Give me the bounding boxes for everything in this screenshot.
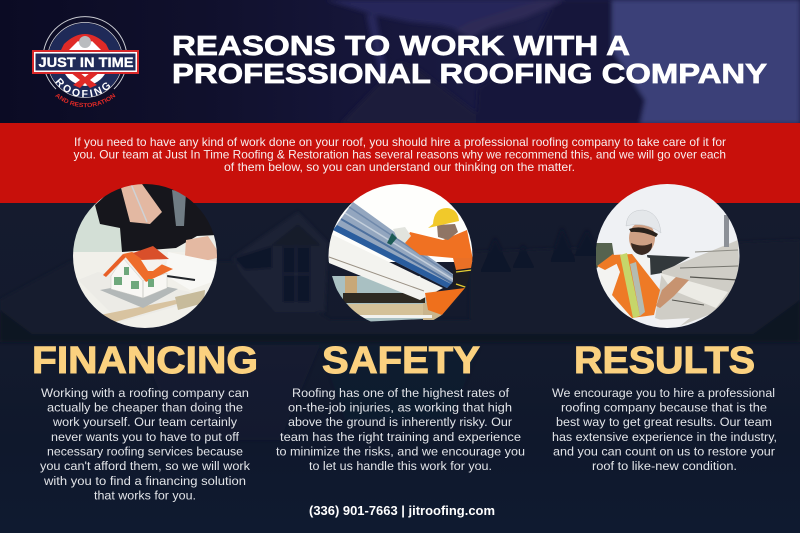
- body: safety: above the ground is inherently risky. Our: [288, 415, 512, 429]
- lower background: house at dusk: [0, 203, 800, 533]
- body: financing: [40, 386, 251, 502]
- body: financing: Working with a roofing company can: [41, 386, 249, 400]
- body: safety: to minimize the risks, and we encourage you: [276, 444, 525, 458]
- column: financing: [32, 339, 258, 502]
- heading: safety: SAFETY: [322, 339, 480, 381]
- logo ring: and restoration: AND RESTORATION: [55, 93, 116, 108]
- red intro band: [0, 123, 800, 203]
- photo: results, smiling roofer with clipboard: [596, 184, 740, 328]
- title: [172, 30, 767, 89]
- photo: financing, model house on paperwork: [73, 184, 217, 328]
- body: financing: work yourself. Our team certainly: [52, 415, 238, 429]
- body: financing: never wants you to have to put off: [51, 430, 240, 444]
- intro text: If you need to have any kind of work done on your roof, you should hire a professional roofing company to take care of it for: [74, 136, 726, 149]
- body: safety: [276, 386, 525, 473]
- body: results: has extensive experience in the industry,: [552, 430, 777, 444]
- photo: roofer silhouette: [325, 0, 800, 124]
- body: financing: you can't afford them, so we will work: [40, 459, 251, 473]
- body: financing: that works for you.: [94, 488, 196, 502]
- body: financing: actually be cheaper than doing the: [47, 400, 243, 414]
- intro text: of them below, so you can understand our thinking on the matter.: [224, 161, 575, 174]
- body: results: and you can count on us to restore your: [553, 444, 775, 458]
- body: financing: necessary roofing services because: [47, 444, 243, 458]
- intro text: [74, 136, 726, 174]
- body: safety: on-the-job injuries, as working that high: [288, 400, 512, 414]
- intro text: you. Our team at Just In Time Roofing & Restoration has several reasons why we recommend this, and we will go over each: [74, 148, 726, 162]
- body: safety: to let us handle this work for you.: [309, 459, 492, 473]
- column: results: [552, 339, 777, 473]
- body: results: best way to get great results. Our team: [556, 415, 772, 429]
- logo: Just In Time Roofing: [32, 16, 139, 108]
- body: results: [552, 386, 777, 473]
- column: safety: [276, 339, 525, 473]
- body: results: roof to like-new condition.: [592, 459, 737, 473]
- body: results: We encourage you to hire a professional: [552, 386, 775, 400]
- header band: [0, 0, 800, 123]
- body: results: roofing company because that is the: [561, 400, 767, 414]
- heading: results: RESULTS: [574, 339, 755, 381]
- title: PROFESSIONAL ROOFING COMPANY: [172, 58, 767, 89]
- logo ring: roofing: ROOFING: [55, 78, 110, 98]
- body: financing: with you to find a financing solution: [43, 474, 246, 488]
- logo wordmark: JUST IN TIME: [38, 55, 134, 70]
- photo: safety, roofer fixing metal panels: [328, 184, 473, 328]
- title: REASONS TO WORK WITH A: [172, 30, 630, 61]
- contact line: (336) 901-7663 | jitroofing.com: [309, 503, 495, 518]
- heading: financing: FINANCING: [32, 339, 258, 381]
- body: safety: Roofing has one of the highest rates of: [292, 386, 510, 400]
- body: safety: team has the right training and experience: [280, 430, 521, 444]
